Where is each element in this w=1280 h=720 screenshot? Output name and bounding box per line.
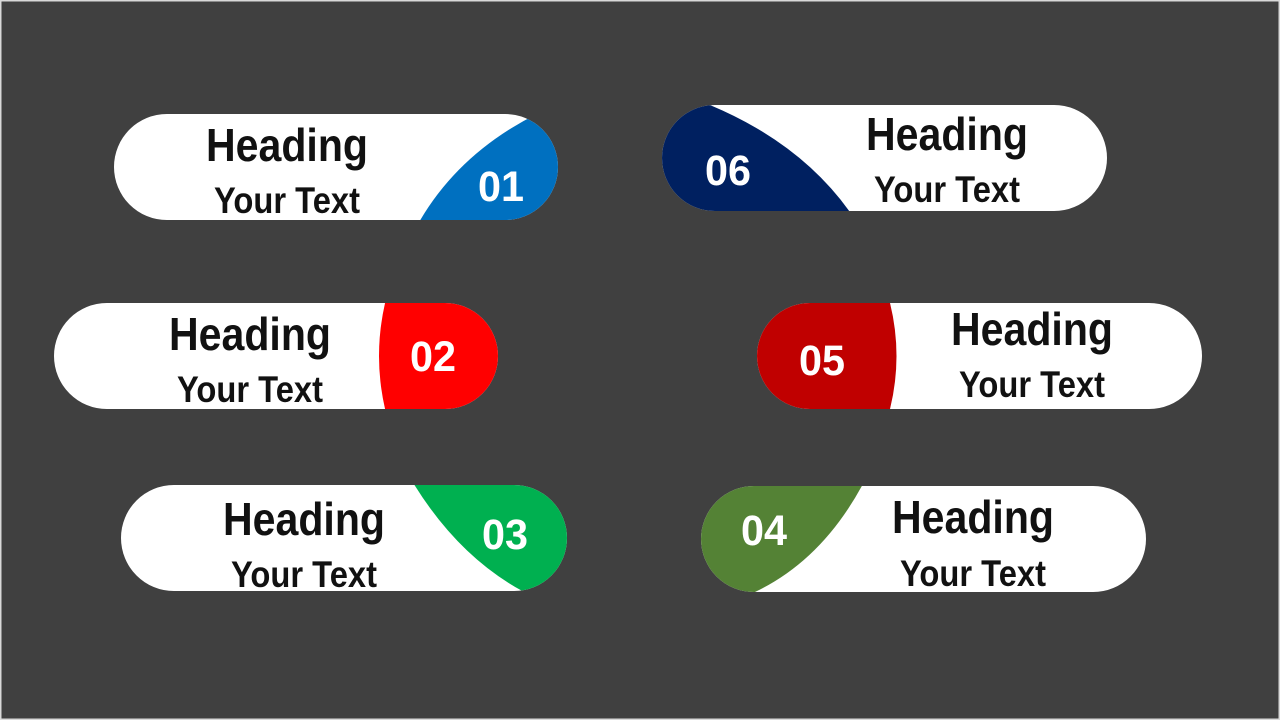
pill 03 — [121, 485, 567, 591]
text 03: Your Text — [231, 554, 377, 595]
segment 02 — [379, 303, 498, 409]
heading 03: Heading — [223, 493, 385, 545]
heading 01: Heading — [206, 119, 368, 171]
number 03: 03 — [482, 511, 528, 559]
text 02: Your Text — [177, 369, 323, 410]
text 05: Your Text — [959, 364, 1105, 405]
number 04: 04 — [741, 507, 787, 555]
number 02: 02 — [410, 333, 456, 381]
number 06: 06 — [705, 147, 751, 195]
segment 03 — [414, 485, 567, 590]
segment 05 — [757, 303, 896, 409]
segment 06 — [662, 105, 850, 211]
pill 06 — [662, 105, 1107, 211]
pill 02 — [54, 303, 498, 409]
pill 01 — [114, 114, 558, 220]
segment 01 — [420, 119, 558, 220]
heading 06: Heading — [866, 108, 1028, 160]
heading 02: Heading — [169, 308, 331, 360]
pill 04 — [701, 486, 1146, 592]
text 06: Your Text — [874, 169, 1020, 210]
segment 04 — [701, 486, 862, 592]
text 04: Your Text — [900, 553, 1046, 594]
number 05: 05 — [799, 337, 845, 385]
text 01: Your Text — [214, 180, 360, 221]
pill 05 — [757, 303, 1202, 409]
number 01: 01 — [478, 163, 524, 211]
heading 05: Heading — [951, 303, 1113, 355]
heading 04: Heading — [892, 491, 1054, 543]
